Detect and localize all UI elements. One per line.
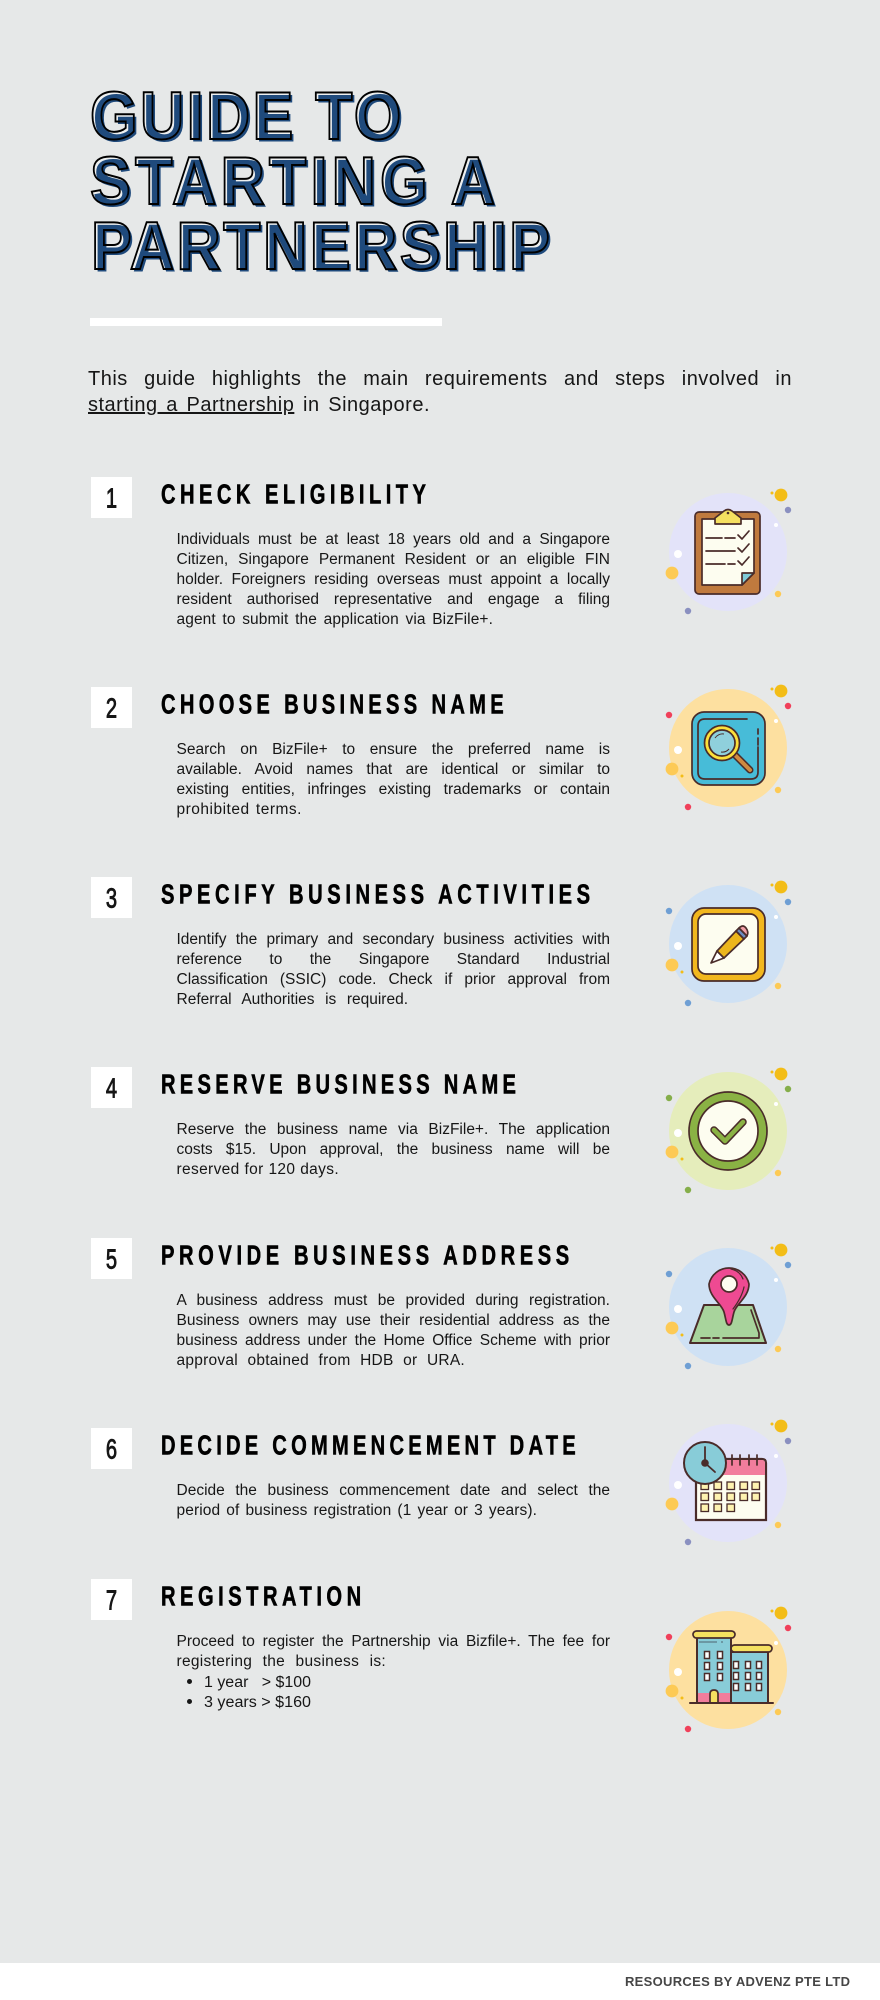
body text: approval obtained from HDB or URA. <box>176 1352 465 1368</box>
body text: period of business registration (1 year or 3 years). <box>176 1502 537 1518</box>
body text: business address under the Home Office Scheme with prior <box>176 1332 610 1348</box>
step number 7: 7 <box>106 1585 117 1616</box>
step 4: reserve business name <box>91 1067 792 1194</box>
intro text: starting a Partnership in Singapore. <box>88 394 430 416</box>
step number 4: 4 <box>106 1073 117 1104</box>
step number 2 <box>91 687 132 728</box>
body text: reference to the Singapore Standard Industrial <box>176 950 610 968</box>
heading: check eligibility: CHECK ELIGIBILITY <box>161 479 426 510</box>
body text: Referral Authorities is required. <box>176 990 408 1008</box>
body text with fee list <box>176 1632 610 1711</box>
heading: provide business address: PROVIDE BUSINESS ADDRESS <box>161 1240 569 1271</box>
icon: office buildings <box>666 1606 792 1732</box>
body text: Business owners may use their residential address as the <box>176 1312 610 1328</box>
body text with fee list: 1 year > $100 <box>204 1674 311 1691</box>
body text: Identify the primary and secondary business activities with <box>176 930 610 948</box>
step number 6 <box>91 1428 132 1469</box>
icon: calendar and clock <box>666 1420 792 1546</box>
icon: check mark <box>666 1068 792 1194</box>
icon: magnifier <box>666 684 792 810</box>
step number 6: 6 <box>106 1434 117 1465</box>
body text: Citizen, Singapore Permanent Resident or an eligible FIN <box>176 550 610 568</box>
step number 5 <box>91 1238 132 1279</box>
step 7: registration <box>91 1579 792 1732</box>
body text: Decide the business commencement date and select the <box>176 1482 610 1498</box>
body text with fee list: registering the business is: <box>176 1652 386 1670</box>
step number 2: 2 <box>106 693 117 724</box>
body text: costs $15. Upon approval, the business name will be <box>176 1140 610 1158</box>
body text: holder. Foreigners residing overseas must appoint a locally <box>176 570 610 588</box>
heading: reserve business name: RESERVE BUSINESS NAME <box>161 1069 516 1100</box>
heading: decide commencement date: DECIDE COMMENCEMENT DATE <box>161 1430 576 1461</box>
body text with fee list: 3 years > $160 <box>204 1694 311 1711</box>
step 6: decide commencement date <box>91 1420 792 1546</box>
step 3: specify business activities <box>91 877 792 1008</box>
step number 1: 1 <box>106 483 117 514</box>
body text: A business address must be provided during registration. <box>176 1292 610 1308</box>
body text: reserved for 120 days. <box>176 1160 339 1178</box>
title: GUIDE TO <box>90 77 401 154</box>
body text <box>176 740 610 818</box>
icon: pencil <box>666 880 792 1006</box>
body text: Classification (SSIC) code. Check if prior approval from <box>176 970 610 988</box>
title: PARTNERSHIP <box>94 209 553 286</box>
intro text <box>88 368 792 416</box>
body text <box>176 530 610 628</box>
body text: prohibited terms. <box>176 800 302 818</box>
body text with fee list: Proceed to register the Partnership via Bizfile+. The fee for <box>176 1632 610 1650</box>
step number 4 <box>91 1067 132 1108</box>
body text: available. Avoid names that are identical or similar to <box>176 760 610 778</box>
body text: existing entities, infringes existing trademarks or contain <box>176 780 610 798</box>
step number 3 <box>91 877 132 918</box>
title underline bar <box>90 318 442 326</box>
body text <box>176 930 610 1008</box>
step 1: check eligibility <box>91 477 792 628</box>
step 2: choose business name <box>91 684 792 818</box>
heading: choose business name: CHOOSE BUSINESS NAME <box>161 689 504 720</box>
title: GUIDE TO <box>90 77 401 154</box>
footer band <box>0 1963 880 2000</box>
body text <box>176 1120 610 1178</box>
heading: specify business activities: SPECIFY BUSINESS ACTIVITIES <box>161 879 590 910</box>
title: PARTNERSHIP <box>91 207 550 284</box>
body text <box>176 1482 610 1518</box>
title <box>90 77 553 286</box>
body text: Search on BizFile+ to ensure the preferred name is <box>176 740 610 758</box>
body text <box>176 1292 610 1368</box>
step number 7 <box>91 1579 132 1620</box>
icon: map pin <box>666 1244 792 1370</box>
title: STARTING A <box>90 142 495 219</box>
step number 3: 3 <box>106 883 117 914</box>
footer credit: RESOURCES BY ADVENZ PTE LTD <box>625 1974 850 1989</box>
heading: registration: REGISTRATION <box>161 1581 361 1612</box>
step 5: provide business address <box>91 1238 792 1370</box>
title: GUIDE TO <box>92 79 404 156</box>
title: STARTING A <box>92 144 498 221</box>
intro text: This guide highlights the main requirements and steps involved in <box>88 368 792 390</box>
title: STARTING A <box>90 142 495 219</box>
body text: Reserve the business name via BizFile+. The application <box>176 1120 610 1138</box>
body text: Individuals must be at least 18 years old and a Singapore <box>176 530 610 548</box>
title: PARTNERSHIP <box>91 207 550 284</box>
step number 5: 5 <box>106 1244 117 1275</box>
body text: agent to submit the application via BizFile+. <box>176 610 493 628</box>
icon: clipboard <box>666 488 792 614</box>
body text: resident authorised representative and engage a filing <box>176 590 610 608</box>
step number 1 <box>91 477 132 518</box>
